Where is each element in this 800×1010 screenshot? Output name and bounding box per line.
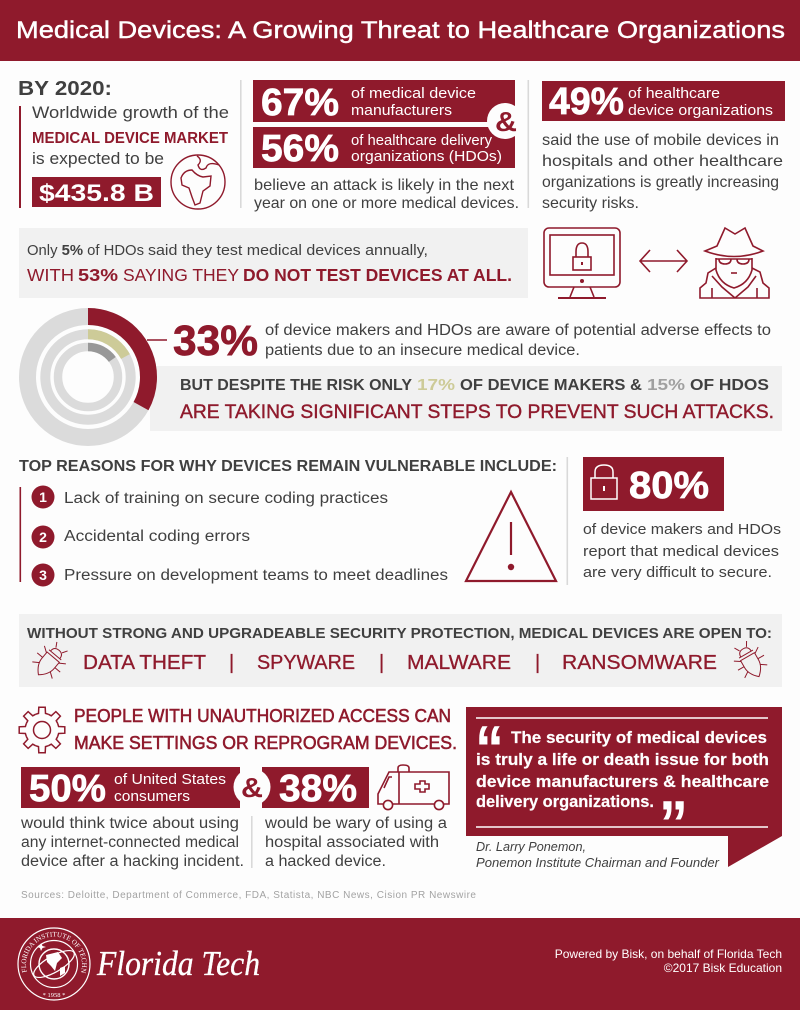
risk statement: ARE TAKING SIGNIFICANT STEPS TO PREVENT SUCH ATTACKS. [180, 401, 774, 423]
panel: mobile device risk [542, 81, 785, 212]
panel: by 2020 market growth [18, 77, 229, 209]
risk statement: 15% [647, 377, 685, 394]
credit: Powered by Bisk, on behalf of Florida Tech [555, 947, 782, 961]
stat: 33 percent: patients due to an insecure medical device. [265, 342, 580, 359]
icon: locked monitor [544, 228, 620, 298]
testing callout: 53% [78, 265, 118, 285]
stat description: of device makers and HDOs [583, 522, 781, 538]
heading: unauthorized access: PEOPLE WITH UNAUTHORIZED ACCESS CAN [74, 706, 451, 726]
list: top reasons [20, 486, 448, 586]
reason 1: 1 [39, 489, 47, 505]
heading: top reasons: TOP REASONS FOR WHY DEVICES REMAIN VULNERABLE INCLUDE: [19, 458, 557, 475]
consumer text left [20, 815, 244, 870]
testing callout: SAYING THEY [123, 265, 239, 285]
threats list: | [379, 652, 384, 674]
market growth text: Worldwide growth of the [32, 103, 229, 122]
stat: 33 percent: of device makers and HDOs are aware of potential adverse effects to [265, 322, 771, 339]
icon: ambulance [378, 765, 449, 810]
icon: spy [700, 228, 769, 298]
stat: 56 percent: 56% [261, 128, 339, 170]
reason 1: Lack of training on secure coding practices [64, 490, 388, 507]
quote text: delivery organizations. [476, 793, 654, 811]
quote text: device manufacturers & healthcare [476, 773, 769, 791]
threats list: | [535, 652, 540, 674]
market growth text: is expected to be [32, 149, 164, 168]
stat: 38 percent [262, 767, 369, 810]
stat description: report that medical devices [583, 544, 779, 560]
stat: 50 percent: 50% [29, 768, 106, 810]
stat: 56 percent [253, 127, 515, 170]
stat: 50 percent: consumers [114, 788, 190, 805]
panel: 80 percent stat [583, 457, 781, 581]
stat: 49 percent: of healthcare [628, 85, 720, 102]
stat: 56 percent: organizations (HDOs) [351, 148, 502, 165]
open quote mark: “ [475, 712, 504, 785]
attack likelihood text [254, 177, 519, 212]
stat: 49 percent: 49% [549, 81, 624, 123]
quote attribution: Dr. Larry Ponemon, [476, 839, 586, 854]
mobile risk text [542, 132, 783, 212]
stat: 49 percent: device organizations [628, 102, 773, 119]
heading: by 2020: BY 2020: [18, 77, 112, 100]
stat: 33 percent: 33% [173, 317, 258, 365]
stat: 50 percent [21, 767, 240, 810]
logo: seal [17, 927, 91, 1001]
logo: wordmark: Florida Tech [96, 944, 260, 983]
icon: warning triangle [466, 492, 556, 581]
market value badge [32, 177, 161, 207]
heading: unauthorized access [74, 706, 457, 753]
heading: unauthorized access: MAKE SETTINGS OR REPROGRAM DEVICES. [74, 733, 457, 753]
panel: risk awareness band [150, 366, 782, 431]
threats list: SPYWARE [257, 652, 355, 674]
reason 2: 2 [39, 529, 47, 545]
ampersand badge: & [241, 772, 263, 803]
consumer text right: a hacked device. [265, 853, 386, 870]
arrow: double headed [640, 250, 687, 272]
threats list: | [229, 652, 234, 674]
risk statement [180, 377, 774, 423]
stat description [583, 522, 781, 581]
reason 1 [32, 486, 388, 508]
mobile risk text: hospitals and other healthcare [542, 153, 783, 170]
consumer text right [264, 815, 447, 870]
consumer text left: any internet-connected medical [21, 834, 239, 851]
close quote mark: ” [659, 787, 688, 860]
credit: ©2017 Bisk Education [664, 961, 782, 975]
quote attribution: Ponemon Institute Chairman and Founder [476, 855, 720, 870]
threats list: RANSOMWARE [562, 652, 717, 674]
mobile risk text: said the use of mobile devices in [542, 132, 779, 149]
icon: gear [19, 707, 65, 753]
stat box: 80% [629, 465, 709, 507]
testing callout: WITH [27, 265, 74, 285]
ampersand badge [234, 768, 270, 806]
stat: 56 percent: of healthcare delivery [351, 132, 492, 149]
threats list: DATA THEFT [83, 652, 206, 674]
stat: 49 percent [542, 81, 785, 123]
consumer text right: would be wary of using a [264, 815, 447, 832]
testing callout [27, 265, 512, 285]
logo: seal: * 1958 * [43, 992, 65, 999]
risk statement: OF DEVICE MAKERS & [460, 377, 642, 394]
reason 2 [32, 526, 250, 548]
ampersand badge: & [495, 106, 517, 137]
panel: quote [466, 707, 782, 867]
chart: awareness donut [28, 316, 148, 438]
mobile risk text: organizations is greatly increasing [542, 174, 779, 191]
testing text [27, 242, 428, 259]
reason 3: 3 [39, 567, 47, 583]
panel: consumer stats [20, 765, 449, 870]
sources: Sources: Deloitte, Department of Commerce, FDA, Statista, NBC News, Cision PR Newswire [21, 890, 476, 901]
consumer text left: device after a hacking incident. [21, 853, 244, 870]
panel: device testing [19, 228, 528, 298]
quote text: is truly a life or death issue for both [476, 751, 769, 769]
icon: globe [171, 155, 225, 209]
stat description: are very difficult to secure. [583, 565, 772, 581]
testing text: said they test medical devices annually, [148, 242, 428, 259]
header banner [0, 0, 800, 61]
risk statement: 17% [417, 377, 455, 394]
quote text: The security of medical devices [511, 729, 767, 747]
stat: 67 percent [253, 80, 515, 124]
panel: threats [19, 614, 782, 687]
stat: 50 percent: of United States [114, 771, 226, 788]
stat: 38 percent: 38% [279, 768, 357, 810]
threats heading: WITHOUT STRONG AND UPGRADEABLE SECURITY PROTECTION, MEDICAL DEVICES ARE OPEN TO: [27, 625, 772, 642]
stat: 67 percent: 67% [261, 82, 339, 124]
stat box [583, 457, 724, 511]
market growth text: MEDICAL DEVICE MARKET [32, 130, 229, 147]
panel: attack likelihood stats [253, 80, 523, 212]
icon: padlock [591, 465, 617, 499]
reason 2: Accidental coding errors [64, 528, 250, 545]
testing callout: DO NOT TEST DEVICES AT ALL. [243, 265, 512, 285]
consumer text right: hospital associated with [265, 834, 439, 851]
risk statement: OF HDOS [690, 377, 769, 394]
market growth text [32, 103, 229, 168]
reason 3: Pressure on development teams to meet deadlines [64, 567, 448, 584]
risk statement: BUT DESPITE THE RISK ONLY [180, 377, 413, 394]
ampersand badge [487, 103, 523, 139]
threats list: MALWARE [407, 652, 511, 674]
attack likelihood text: year on one or more medical devices. [254, 195, 519, 212]
stat: 67 percent: of medical device [351, 85, 476, 102]
quote attribution [476, 839, 720, 870]
icon: bug right [728, 637, 772, 684]
title: Medical Devices: A Growing Threat to Healthcare Organizations [16, 17, 785, 44]
attack likelihood text: believe an attack is likely in the next [254, 177, 515, 194]
reason 3 [32, 564, 448, 586]
consumer text left: would think twice about using [20, 815, 239, 832]
market value badge: $435.8 B [39, 180, 154, 207]
mobile risk text: security risks. [542, 195, 639, 212]
credit [555, 947, 782, 975]
quote text [476, 729, 769, 811]
testing text: Only 5% of HDOs [27, 242, 144, 259]
threats list [83, 652, 717, 674]
stat: 67 percent: manufacturers [351, 102, 452, 119]
icon: bug left [27, 637, 74, 684]
stat: 33 percent [173, 317, 771, 365]
